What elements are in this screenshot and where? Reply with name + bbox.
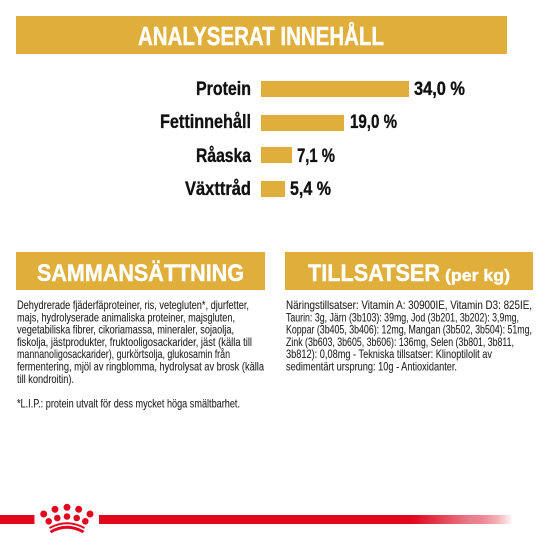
text block: additives list: 3b812): 0,08mg - Tekniska tillsatser: Klinoptilolit av [286,348,492,361]
bar row: crude fibre [185,179,331,200]
bar row: fat: 19,0 % [350,112,397,133]
heading banner: analyserat innehåll [16,16,507,54]
footer: red rule with crown logo [0,504,513,532]
bar row: crude fibre: 5,4 % [290,179,331,200]
bar row: protein: 34,0 % [414,79,465,100]
text block: additives list [286,299,532,374]
text block: ingredients [17,299,264,386]
bar row: crude ash [196,146,335,167]
heading banner: sammansättning: SAMMANSÄTTNING [37,260,244,287]
text block: ingredients: fermentering, mjöl av ringblomma, hydrolysat av brosk (källa [17,360,264,374]
bar row: crude ash: 7,1 % [297,146,335,167]
bar row: protein: Protein [196,79,251,100]
bar row: crude fibre: Växttråd [185,179,251,200]
bar row: protein [196,79,465,100]
icon: royal canin crown [40,504,94,532]
bar row: fat [160,112,397,133]
heading banner: tillsatser per kg: (per kg) [445,266,510,285]
text block: ingredients: majs, hydrolyserade animaliska proteiner, majsgluten, [17,311,235,324]
text block: ingredients: fiskolja, jästprodukter, fruktooligosackarider, jäst (källa till [17,336,252,349]
text block: ingredients: mannanoligosackarider), gurkörtsolja, glukosamin från [17,348,230,361]
text block: ingredients: Dehydrerade fjäderfäproteiner, ris, vetegluten*, djurfetter, [17,299,249,312]
heading banner: tillsatser per kg [285,252,533,290]
text block: additives list: sedimentärt ursprung: 10g - Antioxidanter. [286,360,457,374]
red rule left [0,515,34,524]
text block: ingredients: vegetabiliska fibrer, cikoriamassa, mineraler, sojaolja, [17,324,234,337]
panel: composition [16,252,265,410]
bar row: crude ash: Råaska [196,146,251,167]
bar chart [160,79,465,200]
panel: analysed content [16,16,507,200]
red rule right with fade [99,515,513,524]
bar row: fat: Fettinnehåll [160,112,251,133]
text block: ingredients: till kondroitin). [17,373,74,386]
panel: additives [285,252,533,374]
heading banner: analyserat innehåll: ANALYSERAT INNEHÅLL [138,22,384,51]
heading banner: sammansättning [16,252,265,290]
heading banner: tillsatser per kg: TILLSATSER [308,260,440,287]
footnote: L.I.P.: *L.I.P.: protein utvalt för dess mycket höga smältbarhet. [17,398,240,410]
